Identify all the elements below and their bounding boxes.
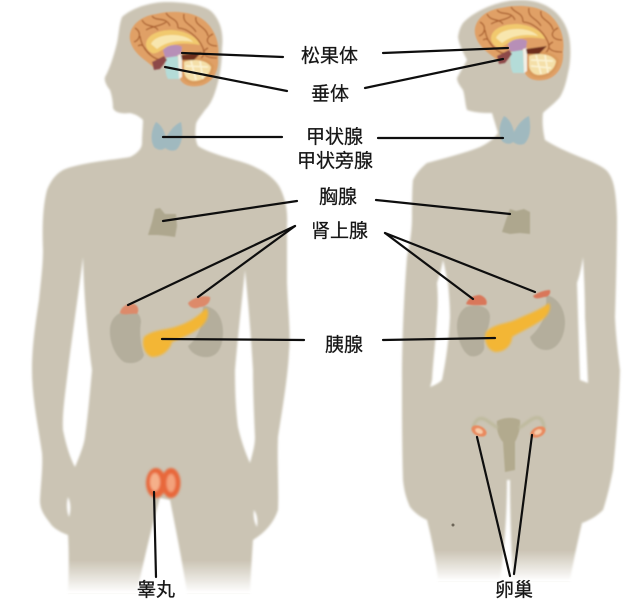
pancreas: female [485,303,550,352]
line: adrenal right 2 [385,233,535,292]
line: adrenal left 1 [128,226,295,305]
label: adrenal: 肾上腺 [311,220,368,242]
leader lines [128,48,535,577]
female body silhouette with organs [402,0,620,580]
label: pineal gland: 松果体 [301,45,358,67]
line: pituitary right [365,59,503,88]
line: adrenal left 2 [198,226,295,297]
fallopian tubes [474,418,544,429]
line: pineal right [383,48,508,53]
line: pancreas left [162,339,304,340]
label: thyroid: 甲状腺 [306,126,363,148]
thymus: male [148,208,177,237]
brain: female [475,6,564,80]
speck [452,524,454,526]
line: thyroid right [378,137,503,139]
thymus: female [502,209,530,234]
testes [146,468,180,498]
brain: male [130,12,219,86]
label: testes: 睾丸 [137,579,175,601]
line: pineal left [182,53,283,57]
label: ovaries: 卵巢 [495,579,533,601]
label: pituitary: 垂体 [311,83,349,105]
thyroid: female [500,116,530,145]
line: adrenal right 1 [385,233,473,299]
label: parathyroid: 甲状旁腺 [297,150,373,172]
thyroid: male [152,122,182,151]
line: thymus left [163,201,297,221]
line: thymus right [376,200,510,214]
silhouette: male body [32,2,290,592]
silhouette: female body [402,0,620,580]
line: thyroid left [163,136,282,138]
adrenal glands: female [466,290,550,305]
male body silhouette with organs [32,2,290,592]
kidneys: male [110,306,223,363]
label: pancreas: 胰腺 [325,334,363,356]
label: thymus: 胸腺 [319,186,357,208]
line: pancreas right [383,338,495,340]
pancreas: male [143,308,208,357]
line: ovary left [477,437,510,576]
uterus [497,418,520,472]
adrenal glands: male [120,296,210,314]
line: pituitary left [165,67,287,91]
line: ovary right [514,435,532,574]
line: testes [154,492,156,577]
ovaries [470,423,547,440]
bottom fade [40,550,590,593]
kidneys: female [457,295,565,356]
